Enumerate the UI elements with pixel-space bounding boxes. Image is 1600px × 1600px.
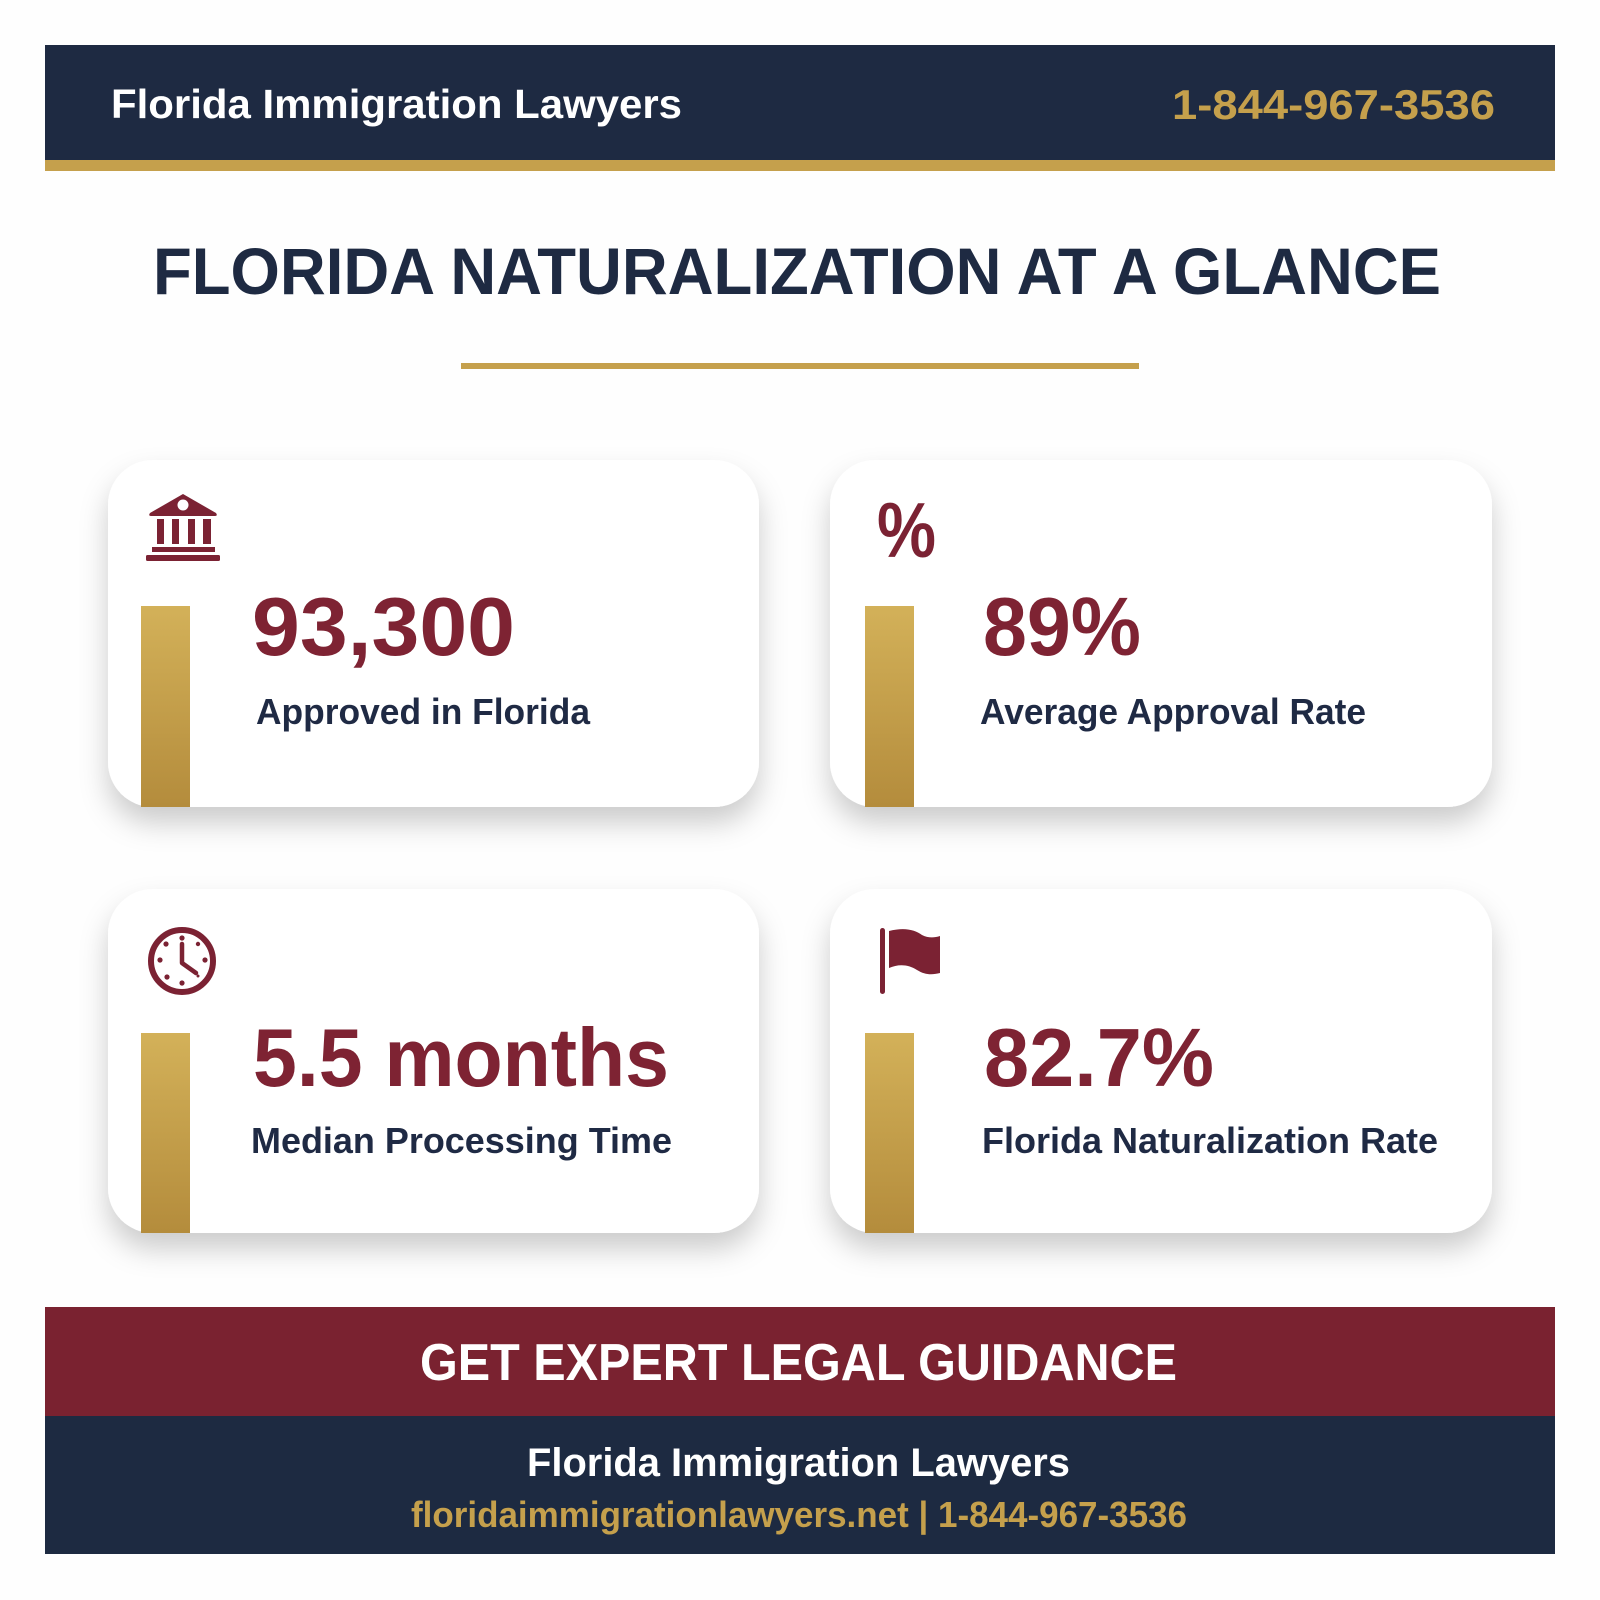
gold accent bar [865,606,914,807]
statistic: 89% [983,580,1141,673]
icon: flag [880,928,940,994]
gold accent bar [141,606,190,807]
footer website and phone: floridaimmigrationlawyers.net | 1-844-967-3536 [411,1494,1187,1536]
panel: processing time [108,889,759,1233]
statistic: 93,300 [252,580,515,673]
statistic label: Florida Naturalization Rate [982,1120,1438,1161]
header phone number: 1-844-967-3536 [1172,81,1495,128]
icon: clock [151,930,213,992]
gold accent bar [141,1033,190,1233]
banner heading: GET EXPERT LEGAL GUIDANCE [420,1334,1177,1392]
footer firm name: Florida Immigration Lawyers [527,1441,1070,1485]
icon: courthouse [146,494,220,561]
footer contact block [45,1416,1555,1554]
top header bar [45,45,1555,171]
panel: naturalization rate [830,889,1492,1233]
icon: percent: % [877,486,936,574]
statistic: 5.5 months [253,1011,669,1104]
call to action banner [45,1307,1555,1417]
panel: approved in Florida [108,460,759,807]
gold accent bar [865,1033,914,1233]
panel: approval rate [830,460,1492,807]
title: FLORIDA NATURALIZATION AT A GLANCE [153,234,1441,308]
statistic: 82.7% [984,1011,1214,1104]
statistic label: Approved in Florida [256,691,591,732]
statistic label: Median Processing Time [251,1120,672,1161]
statistic label: Average Approval Rate [980,691,1366,732]
header firm name: Florida Immigration Lawyers [111,81,682,127]
title underline [461,363,1139,369]
